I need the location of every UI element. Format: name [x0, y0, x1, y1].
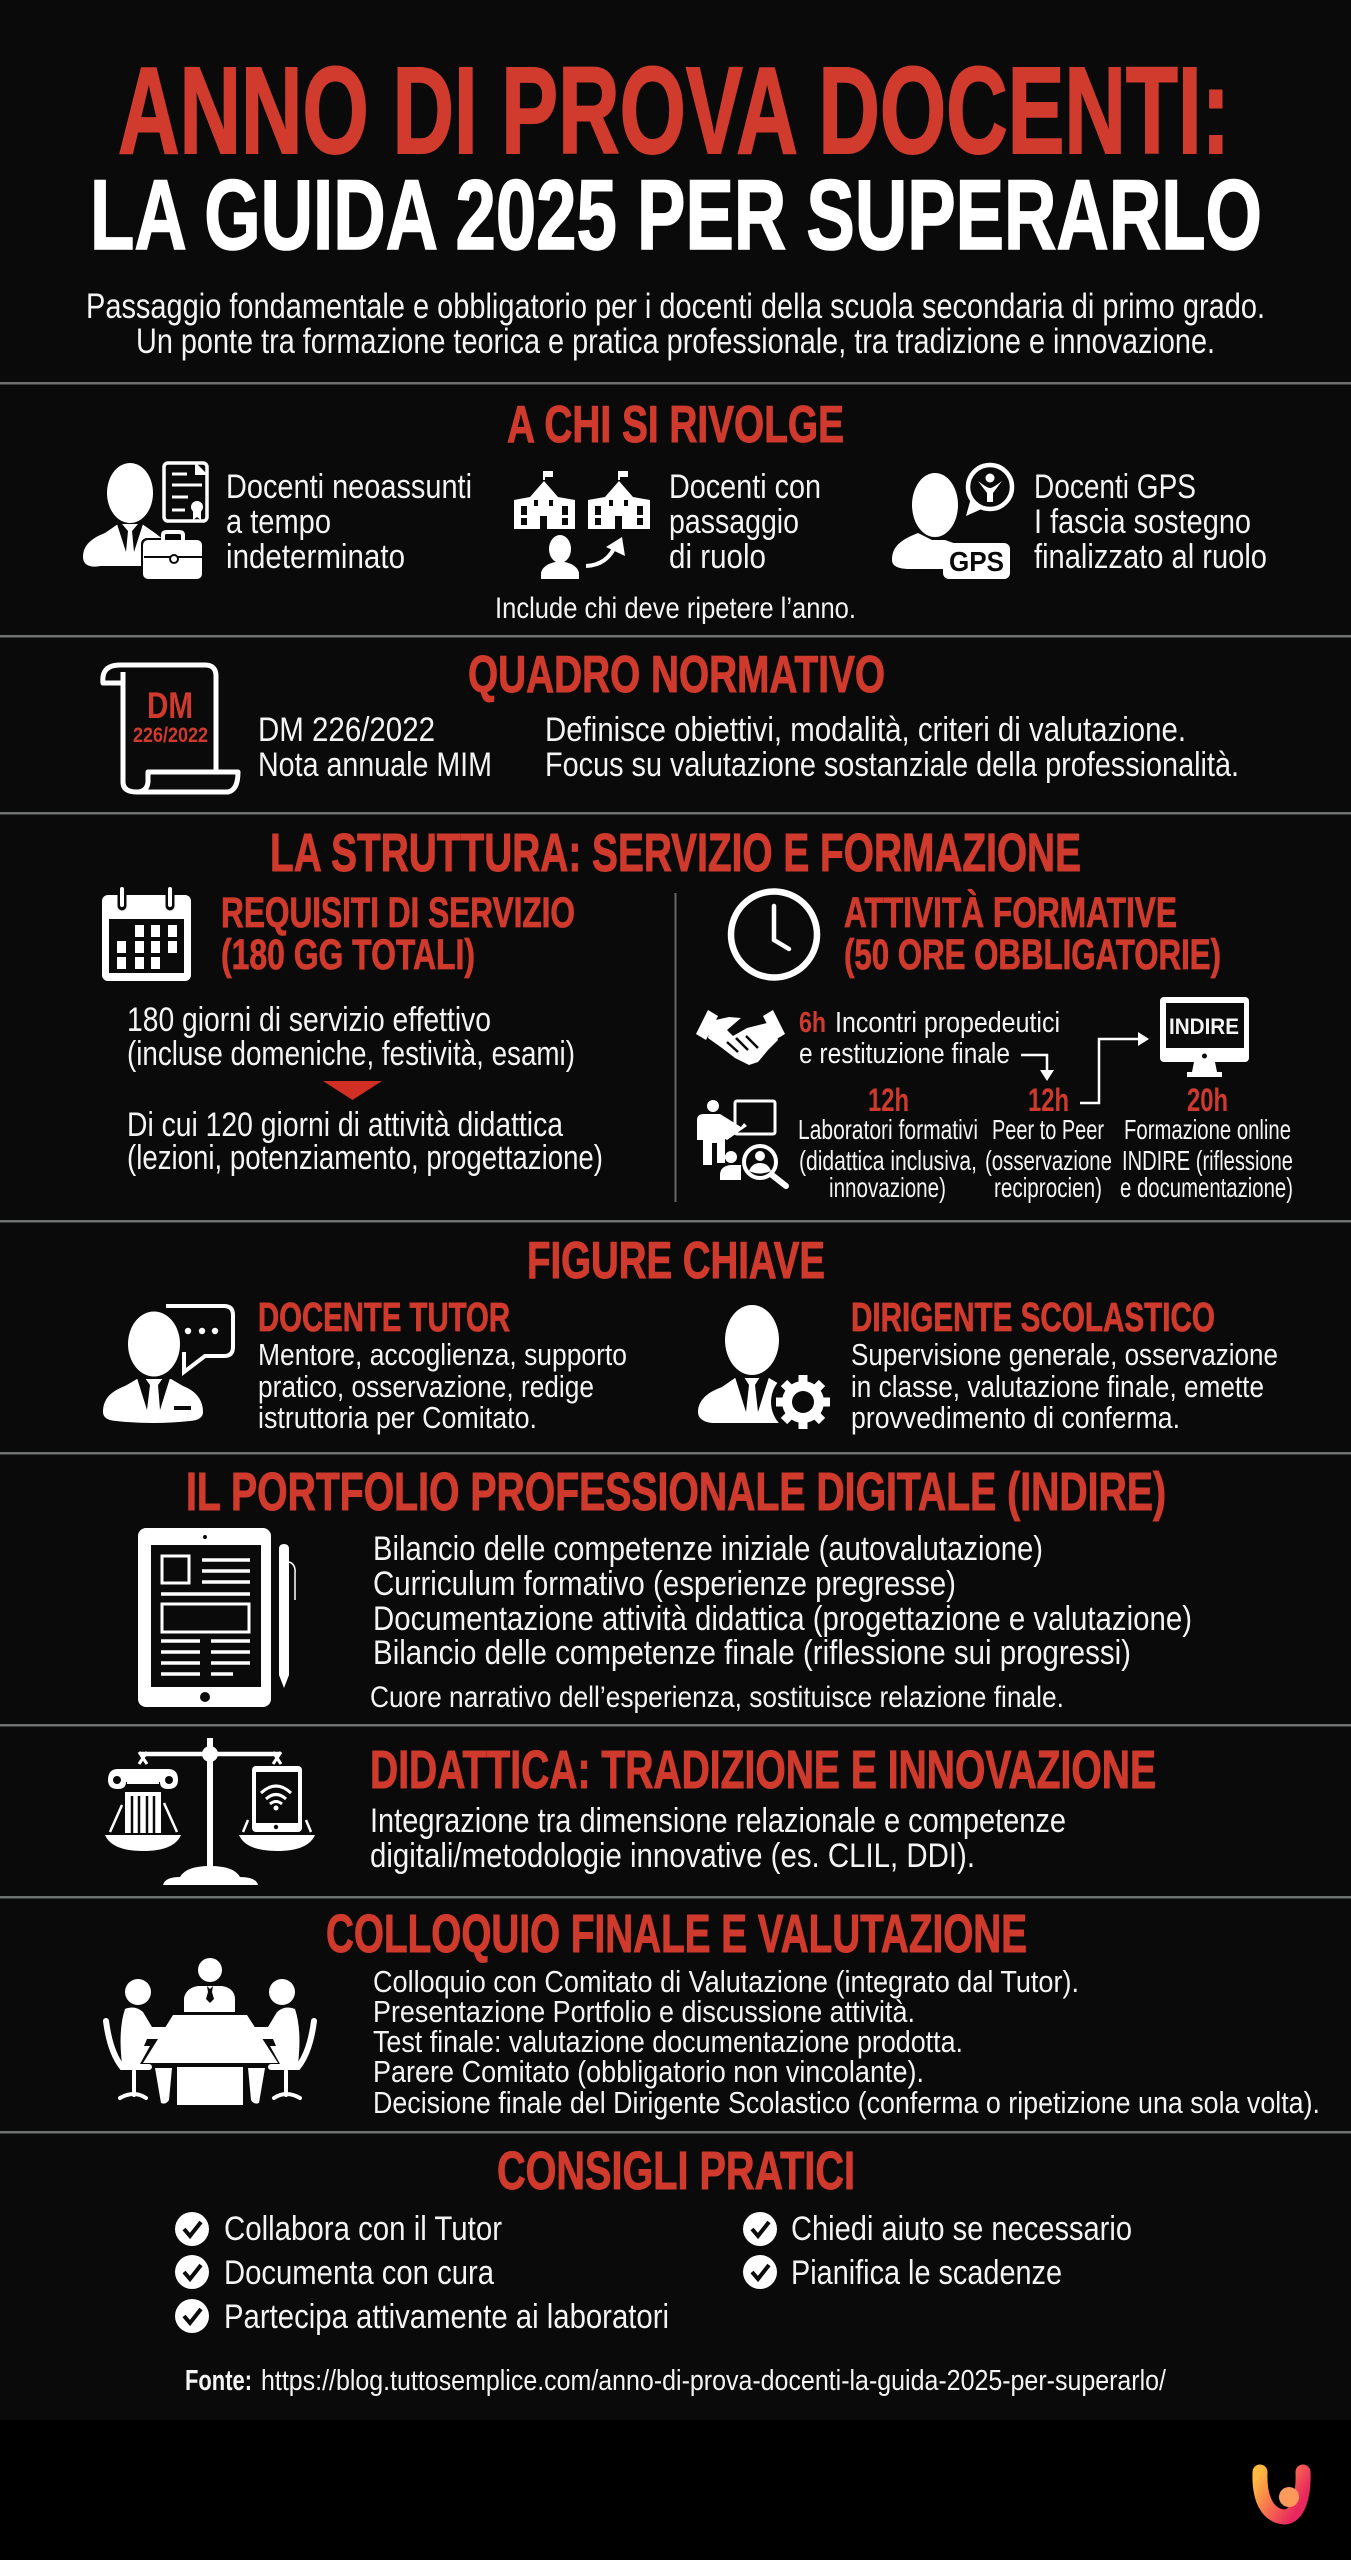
- text: 6h incontri: 6h: [799, 1007, 826, 1039]
- step: 12h laboratori: innovazione): [829, 1172, 946, 1203]
- text: definizione: Definisce obiettivi, modalità, criteri di valutazione.: [545, 711, 1186, 749]
- subsection: docente tutor: pratico, osservazione, redige: [258, 1369, 594, 1404]
- arrow: red triangle: [323, 1081, 382, 1100]
- title: [90, 43, 1262, 270]
- text: 120 giorni: [127, 1106, 603, 1177]
- step: 20h online: Formazione online: [1124, 1114, 1291, 1145]
- step: 20h online: [1120, 1082, 1293, 1203]
- text: 120 giorni: Di cui 120 giorni di attività didattica: [127, 1106, 563, 1144]
- text: 120 giorni: (lezioni, potenziamento, progettazione): [127, 1139, 603, 1177]
- text: neoassunti: Docenti neoassunti: [226, 468, 472, 506]
- panel: consigli pratici: [175, 2141, 1132, 2336]
- subsection: docente tutor: Mentore, accoglienza, supporto: [258, 1337, 627, 1372]
- text: passaggio di ruolo: passaggio: [669, 503, 799, 541]
- step: 12h peer to peer: [985, 1082, 1112, 1203]
- text: GPS: finalizzato al ruolo: [1034, 538, 1267, 576]
- icon: dirigente with gear: [698, 1305, 835, 1434]
- step: 12h peer to peer: Peer to Peer: [992, 1114, 1104, 1145]
- panel: didattica: [105, 1738, 1156, 1885]
- list: colloquio steps: Presentazione Portfolio e discussione attività.: [373, 1994, 915, 2029]
- subsection: dirigente scolastico: DIRIGENTE SCOLASTICO: [851, 1294, 1215, 1340]
- heading: colloquio finale: COLLOQUIO FINALE E VALUTAZIONE: [326, 1904, 1027, 1964]
- icon: scales with column and tablet: [105, 1738, 315, 1885]
- icon: logo: [1260, 2472, 1303, 2517]
- step: 12h peer to peer: (osservazione: [985, 1145, 1112, 1176]
- source line: Fonte:: [185, 2365, 252, 2397]
- subsection: dirigente scolastico: provvedimento di conferma.: [851, 1400, 1180, 1435]
- subheading: requisiti di servizio: [221, 889, 575, 979]
- source line: https://blog.tuttosemplice.com/anno-di-prova-docenti-la-guida-2025-per-superarlo/: [261, 2365, 1167, 2397]
- text: riferimenti: Nota annuale MIM: [258, 746, 492, 784]
- list: portfolio components: [373, 1530, 1192, 1672]
- list: colloquio steps: Test finale: valutazione documentazione prodotta.: [373, 2024, 963, 2059]
- step: 20h online: 20h: [1187, 1082, 1228, 1118]
- text: 6h incontri: Incontri propedeutici: [835, 1007, 1060, 1039]
- panel: colloquio finale: [106, 1904, 1320, 2120]
- subsection: docente tutor: DOCENTE TUTOR: [258, 1294, 510, 1340]
- icon: clock: [731, 892, 817, 978]
- list: colloquio steps: Colloquio con Comitato di Valutazione (integrato dal Tutor).: [373, 1964, 1079, 1999]
- text: integrazione: Integrazione tra dimensione relazionale e competenze: [370, 1802, 1066, 1840]
- text: neoassunti: a tempo: [226, 503, 331, 541]
- step: 12h peer to peer: reciprocien): [994, 1172, 1102, 1203]
- icon: neoassunti person with certificate and briefcase: [83, 462, 208, 581]
- panel: quadro normativo: [103, 646, 1239, 792]
- arrow: incontri to peer: [1021, 1055, 1054, 1081]
- step: 12h laboratori: 12h: [868, 1082, 909, 1118]
- list: portfolio components: Bilancio delle competenze iniziale (autovalutazione): [373, 1530, 1043, 1568]
- panel: portfolio: [138, 1462, 1192, 1714]
- text: neoassunti: indeterminato: [226, 538, 405, 576]
- subsection: dirigente scolastico: in classe, valutazione finale, emette: [851, 1369, 1264, 1404]
- icon: teacher and search: [697, 1100, 786, 1186]
- icon: schools with person and arrow: [514, 471, 650, 579]
- text: 6h incontri: [799, 1007, 1060, 1070]
- text: passaggio di ruolo: di ruolo: [669, 538, 766, 576]
- tip: pianifica: Pianifica le scadenze: [791, 2254, 1062, 2292]
- heading: figure chiave: FIGURE CHIAVE: [527, 1232, 825, 1290]
- text: integrazione: [370, 1802, 1066, 1875]
- tip: partecipa: Partecipa attivamente ai laboratori: [224, 2298, 669, 2336]
- step: 12h laboratori: [798, 1082, 978, 1203]
- divider between columns: [674, 893, 676, 1202]
- step: 12h peer to peer: 12h: [1028, 1082, 1069, 1118]
- panel: figure chiave: [103, 1232, 1278, 1435]
- subsection: dirigente scolastico: [851, 1294, 1278, 1435]
- tip: chiedi aiuto: Chiedi aiuto se necessario: [791, 2210, 1132, 2248]
- subsection: dirigente scolastico: Supervisione generale, osservazione: [851, 1337, 1278, 1372]
- icon: GPS person with speech bubble: GPS: [949, 546, 1004, 577]
- list: portfolio components: Documentazione attività didattica (progettazione e valutazione): [373, 1600, 1192, 1638]
- subsection: docente tutor: istruttoria per Comitato.: [258, 1400, 537, 1435]
- icon: DM scroll: DM: [147, 685, 193, 726]
- step: 12h laboratori: (didattica inclusiva,: [799, 1145, 977, 1176]
- panel: la struttura: [102, 823, 1293, 1203]
- text: riferimenti: DM 226/2022: [258, 711, 435, 749]
- note: cuore narrativo: Cuore narrativo dell’esperienza, sostituisce relazione finale.: [370, 1681, 1064, 1714]
- heading: a chi si rivolge: A CHI SI RIVOLGE: [507, 396, 844, 454]
- text: 6h incontri: e restituzione finale: [799, 1038, 1010, 1070]
- subheading: requisiti di servizio: REQUISITI DI SERVIZIO: [221, 889, 575, 937]
- text: 180 giorni: (incluse domeniche, festività, esami): [127, 1035, 575, 1073]
- arrow: peer to INDIRE: [1080, 1032, 1149, 1103]
- icon: INDIRE monitor: INDIRE: [1169, 1014, 1239, 1039]
- text: definizione: [545, 711, 1239, 784]
- panel: a chi si rivolge: [83, 396, 1267, 625]
- list: portfolio components: Bilancio delle competenze finale (riflessione sui progressi): [373, 1634, 1131, 1672]
- tip: documenta: Documenta con cura: [224, 2254, 494, 2292]
- subheading: requisiti di servizio: (180 GG TOTALI): [221, 931, 475, 979]
- text: definizione: Focus su valutazione sostanziale della professionalità.: [545, 746, 1239, 784]
- list: portfolio components: Curriculum formativo (esperienze pregresse): [373, 1565, 956, 1603]
- icon: tablet and pen: [138, 1528, 295, 1707]
- text: GPS: [1034, 468, 1267, 576]
- subheading: attivita formative: [844, 889, 1221, 979]
- icon: DM scroll: [103, 665, 238, 792]
- list: colloquio steps: [373, 1964, 1320, 2120]
- subheading: attivita formative: (50 ORE OBBLIGATORIE): [844, 931, 1221, 979]
- icon: handshake: [696, 1010, 785, 1065]
- text: passaggio di ruolo: Docenti con: [669, 468, 821, 506]
- subheading: attivita formative: ATTIVITÀ FORMATIVE: [844, 889, 1177, 937]
- tip: collabora: Collabora con il Tutor: [224, 2210, 502, 2248]
- icon: DM scroll: 226/2022: [133, 724, 208, 747]
- icon: meeting table: [106, 1958, 314, 2105]
- step: 12h laboratori: Laboratori formativi: [798, 1114, 978, 1145]
- icon: calendar: [102, 887, 191, 981]
- text: passaggio di ruolo: [669, 468, 821, 576]
- text: GPS: Docenti GPS: [1034, 468, 1196, 506]
- text: 180 giorni: 180 giorni di servizio effettivo: [127, 1001, 491, 1039]
- text: riferimenti: [258, 711, 492, 784]
- text: neoassunti: [226, 468, 472, 576]
- icon: GPS person with speech bubble: [892, 465, 1012, 579]
- text: 180 giorni: [127, 1001, 575, 1073]
- text: GPS: I fascia sostegno: [1034, 503, 1251, 541]
- text: integrazione: digitali/metodologie innovative (es. CLIL, DDI).: [370, 1837, 975, 1875]
- icon: tutor with speech bubble: [103, 1306, 233, 1423]
- intro text: [86, 287, 1265, 361]
- subsection: docente tutor: [258, 1294, 627, 1435]
- heading: consigli pratici: CONSIGLI PRATICI: [497, 2141, 855, 2201]
- list: colloquio steps: Parere Comitato (obbligatorio non vincolante).: [373, 2054, 924, 2089]
- note: ripetere anno: Include chi deve ripetere l’anno.: [495, 592, 856, 625]
- heading: quadro normativo: QUADRO NORMATIVO: [468, 646, 885, 704]
- icon: INDIRE monitor: [1160, 997, 1249, 1077]
